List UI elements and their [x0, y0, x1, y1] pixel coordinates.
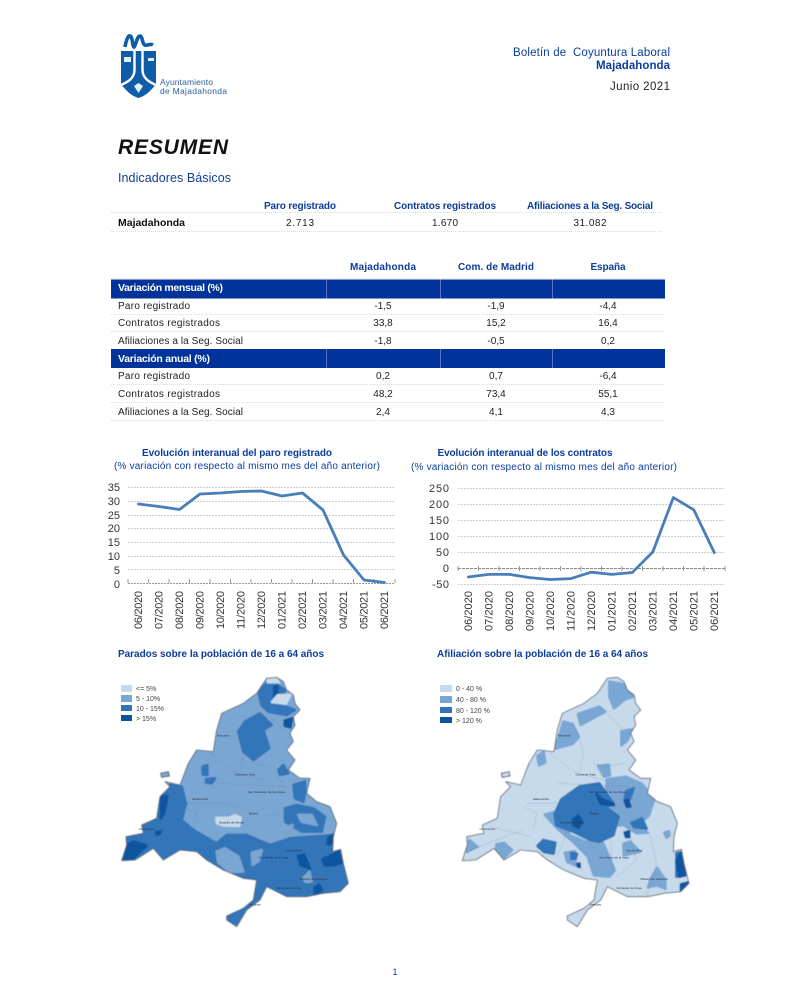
line chart: contratos: 50 [436, 547, 449, 559]
municipality labels: Valdemorillo [533, 797, 549, 801]
band: Variación anual [111, 349, 665, 368]
line chart: paro registrado [108, 482, 395, 629]
line chart: paro registrado: 10/2020 [215, 591, 227, 629]
heading: Indicadores Básicos: Indicadores Básicos [118, 171, 231, 185]
logo: Ayuntamiento de Majadahonda: Ayuntamiento [160, 77, 213, 87]
municipality labels: Campo Real [285, 849, 302, 853]
table: variation by territory [111, 262, 665, 420]
rows: monthly variation [118, 301, 618, 347]
chart heading: contratos: Evolución interanual de los contratos [438, 448, 613, 459]
municipality labels: Colmenar de Oreja [616, 886, 642, 890]
rows: monthly variation: 15,2 [486, 318, 506, 329]
municipality labels: Rascafría [217, 734, 230, 738]
municipality labels: Villarejo de Salvanés [299, 877, 328, 881]
table: basic indicators: 1.670 [432, 218, 458, 229]
line chart: contratos: 06/2020 [463, 591, 475, 631]
table: basic indicators [111, 201, 662, 232]
chart heading: paro registrado [114, 448, 380, 472]
band: Variación anual: Variación anual (%) [118, 353, 210, 365]
line chart: paro registrado: 0 [114, 579, 120, 591]
line chart: paro registrado: 5 [114, 565, 120, 577]
municipality labels: San Martín de la Vega [599, 855, 629, 859]
rows: annual variation: 0,7 [489, 371, 503, 382]
municipality labels: Villarejo de Salvanés [640, 877, 668, 881]
municipality labels: San Sebastián de los Reyes [248, 790, 286, 794]
municipality labels: Cenicientos [139, 827, 155, 831]
table: basic indicators: Afiliaciones a la Seg. Social [527, 201, 653, 212]
rows: annual variation: Contratos registrados [118, 389, 220, 400]
line chart: contratos: -50 [432, 579, 449, 591]
column headers [350, 262, 626, 273]
rows: monthly variation: 33,8 [373, 318, 393, 329]
rows: monthly variation: -4,4 [599, 301, 617, 312]
municipality labels: Campo Real [626, 849, 643, 853]
line chart: contratos: 09/2020 [524, 591, 536, 631]
column headers: Majadahonda [350, 262, 416, 273]
rows: annual variation: -6,4 [599, 371, 617, 382]
legend: afiliación: 0 - 40 % [456, 686, 482, 693]
line chart: contratos: 05/2021 [688, 591, 700, 631]
line chart: paro registrado: 06/2020 [133, 591, 145, 629]
rows: annual variation: Paro registrado [118, 371, 190, 382]
chart heading: contratos: (% variación con respecto al mismo mes del año anterior) [411, 462, 677, 473]
logo: Ayuntamiento de Majadahonda: de Majadahonda [160, 86, 227, 96]
header: bulletin information: Boletín de Coyuntura Laboral [513, 47, 670, 59]
rows: monthly variation: Afiliaciones a la Seg. Social [118, 336, 243, 347]
legend: parados: <= 5% [136, 686, 156, 693]
municipality labels [480, 734, 668, 907]
legend: parados: 10 - 15% [136, 706, 164, 713]
municipality labels: Rascafría [558, 734, 571, 738]
municipality labels: Valdemorillo [192, 797, 208, 801]
legend: afiliación [440, 685, 490, 725]
header: bulletin information [513, 47, 671, 93]
table: basic indicators: Majadahonda [118, 217, 185, 229]
legend: parados: 5 - 10% [136, 696, 160, 703]
rows: annual variation: 55,1 [598, 389, 618, 400]
line chart: contratos: 150 [429, 515, 449, 527]
band: Variación mensual [111, 280, 665, 298]
table: basic indicators: Contratos registrados [394, 201, 496, 212]
table: basic indicators: 31.082 [574, 218, 607, 229]
rows: annual variation [118, 371, 618, 418]
line chart: contratos: 0 [443, 563, 449, 575]
map caption: parados: Parados sobre la población de 16 a 64 años [118, 649, 324, 660]
municipality labels: Colmenar de Oreja [276, 886, 301, 890]
municipality labels: San Sebastián de los Reyes [589, 790, 627, 794]
map caption: afiliación: Afiliación sobre la población de 16 a 64 años [437, 649, 648, 660]
column headers: Com. de Madrid [458, 262, 534, 273]
municipality labels: Madrid [249, 811, 258, 815]
rows: annual variation: 0,2 [376, 371, 390, 382]
line chart: contratos: 04/2021 [668, 591, 680, 631]
rows: monthly variation: 0,2 [601, 336, 615, 347]
legend: afiliación: 40 - 80 % [456, 697, 486, 704]
rows: monthly variation: Contratos registrados [118, 318, 220, 329]
line chart: paro registrado: 10 [108, 551, 120, 563]
municipality labels: Boadilla del Monte [219, 820, 244, 824]
line chart: contratos: 11/2020 [566, 591, 578, 631]
rows: monthly variation: -0,5 [487, 336, 505, 347]
municipality labels: Colmenar Viejo [575, 773, 596, 777]
line chart: contratos: 08/2020 [504, 591, 516, 631]
line chart: contratos [429, 483, 725, 631]
rows: annual variation: 4,1 [489, 407, 503, 418]
rows: monthly variation: 16,4 [598, 318, 618, 329]
column headers: España [590, 262, 626, 273]
rows: annual variation: Afiliaciones a la Seg. Social [118, 407, 243, 418]
line chart: contratos: 10/2020 [545, 591, 557, 631]
line chart: paro registrado: 08/2020 [174, 591, 186, 629]
header: bulletin information: Majadahonda [596, 60, 671, 72]
rows: monthly variation: -1,5 [374, 301, 392, 312]
municipality labels [139, 734, 328, 907]
rows: annual variation: 48,2 [373, 389, 393, 400]
line chart: paro registrado: 05/2021 [358, 591, 370, 629]
legend: afiliación: 80 - 120 % [456, 708, 490, 715]
table: basic indicators: 2.713 [286, 218, 314, 229]
municipality labels: Colmenar Viejo [235, 773, 256, 777]
rows: annual variation: 4,3 [601, 407, 615, 418]
line chart: contratos: 200 [429, 499, 449, 511]
band: Variación mensual: Variación mensual (%) [118, 282, 223, 294]
rows: monthly variation: -1,8 [374, 336, 392, 347]
line chart: contratos: 250 [429, 483, 449, 495]
rows: monthly variation: Paro registrado [118, 301, 190, 312]
chart heading: contratos [411, 448, 677, 473]
header: bulletin information: Junio 2021 [610, 81, 670, 93]
municipality labels: Madrid [589, 811, 599, 815]
line chart: paro registrado: 06/2021 [379, 591, 391, 629]
line chart: paro registrado: 30 [108, 496, 120, 508]
line chart: contratos: 07/2020 [484, 591, 496, 631]
logo: Ayuntamiento de Majadahonda [121, 36, 227, 98]
line chart: paro registrado: 04/2021 [338, 591, 350, 629]
line chart: paro registrado: 09/2020 [194, 591, 206, 629]
line chart: paro registrado: 35 [108, 482, 120, 494]
legend: afiliación: > 120 % [456, 718, 482, 725]
rows: annual variation: 2,4 [376, 407, 390, 418]
rows: annual variation: 73,4 [486, 389, 506, 400]
line chart: paro registrado: 11/2020 [236, 591, 248, 629]
line chart: paro registrado: 12/2020 [256, 591, 268, 629]
table: basic indicators: Paro registrado [264, 201, 336, 212]
line chart: paro registrado: 07/2020 [154, 591, 166, 629]
rows: monthly variation: -1,9 [487, 301, 505, 312]
line chart: paro registrado: 25 [108, 510, 120, 522]
line chart: contratos: 100 [429, 531, 449, 543]
line chart: contratos: 02/2021 [627, 591, 639, 631]
title: RESUMEN: RESUMEN [118, 136, 229, 159]
chart heading: paro registrado: (% variación con respecto al mismo mes del año anterior) [114, 461, 380, 472]
line chart: contratos: 01/2021 [606, 591, 618, 631]
map: parados por municipio [120, 676, 350, 928]
line chart: paro registrado: 15 [108, 537, 120, 549]
municipality labels: Cenicientos [480, 827, 496, 831]
line chart: paro registrado: 03/2021 [318, 591, 330, 629]
map: afiliación por municipio [461, 676, 690, 928]
page number: 1 [392, 967, 398, 977]
line chart: contratos: 12/2020 [586, 591, 598, 631]
line chart: paro registrado: 01/2021 [276, 591, 288, 629]
municipality labels: Aranjuez [249, 903, 261, 907]
chart heading: paro registrado: Evolución interanual del paro registrado [142, 448, 332, 459]
line chart: paro registrado: 20 [108, 523, 120, 535]
line chart: contratos: 06/2021 [709, 591, 721, 631]
municipality labels: Boadilla del Monte [560, 820, 585, 824]
municipality labels: Aranjuez [590, 903, 602, 907]
line chart: contratos: 03/2021 [648, 591, 660, 631]
line chart: paro registrado: 02/2021 [297, 591, 309, 629]
legend: parados: > 15% [136, 716, 156, 723]
municipality labels: San Martín de la Vega [259, 855, 288, 859]
legend: parados [121, 685, 164, 723]
